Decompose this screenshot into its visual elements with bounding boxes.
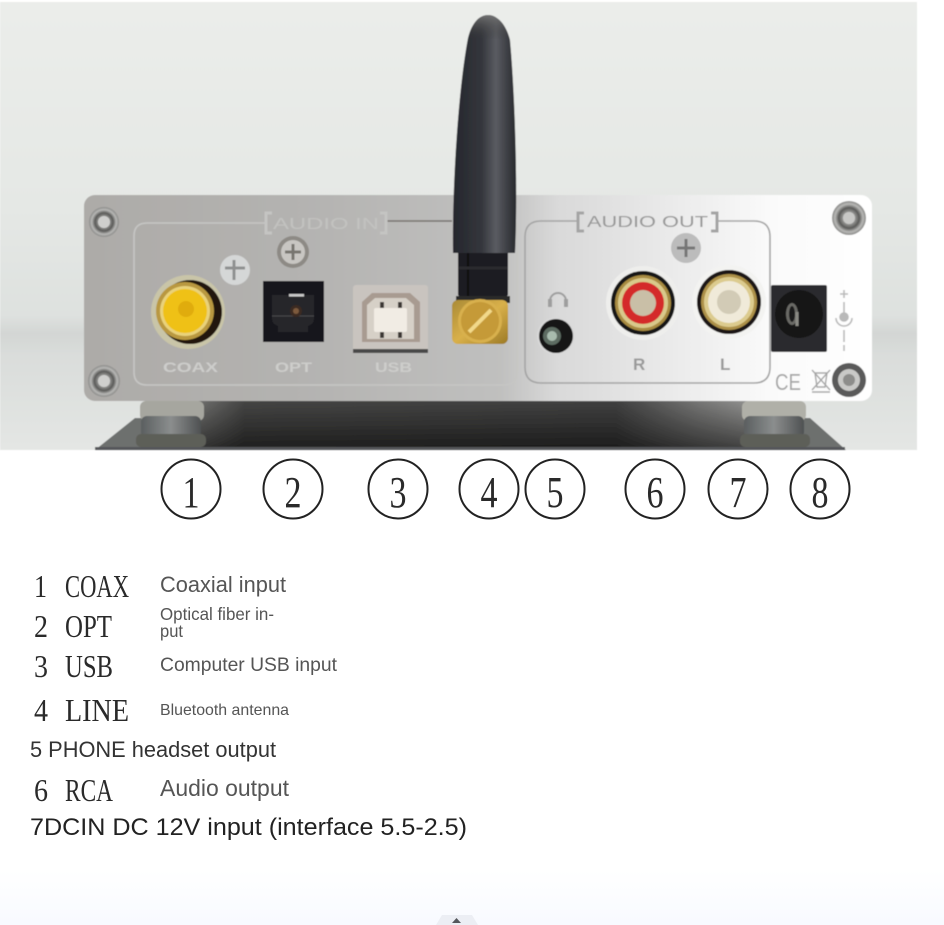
dc power jack (771, 285, 827, 352)
row 1 coax: COAX (65, 568, 129, 604)
row 6 rca: Audio output (160, 775, 290, 801)
callout 6 (626, 460, 684, 518)
rca port right (606, 266, 680, 340)
legend (30, 568, 467, 841)
right foot (740, 401, 810, 447)
callout 2 (264, 460, 322, 518)
audio in label: AUDIO IN (273, 216, 379, 233)
row 7 dc input: 7DCIN DC 12V input (interface 5.5-2.5) (30, 814, 467, 841)
rca label R: R (633, 355, 645, 374)
row 4 line: LINE (65, 692, 129, 728)
coax port (151, 275, 225, 349)
row 6 rca (34, 772, 290, 808)
coax label: COAX (163, 359, 219, 375)
corner screw top right (832, 201, 866, 235)
callout 4 (460, 460, 518, 518)
product photo (0, 2, 917, 450)
antenna (453, 15, 516, 303)
callout 3: 3 (390, 468, 406, 517)
row 4 line (34, 692, 289, 728)
scroll to top tab (436, 915, 478, 925)
row 6 rca: RCA (65, 772, 113, 808)
row 2 opt: OPT (65, 608, 112, 644)
row 1 coax: Coaxial input (160, 572, 286, 597)
usb label: USB (375, 359, 412, 375)
row 3 usb: USB (65, 648, 113, 684)
table under device (95, 418, 846, 450)
corner screw bottom left (88, 365, 120, 397)
page bottom tint (0, 870, 944, 925)
row 2 opt (34, 604, 274, 644)
row 4 line: 4 (34, 692, 48, 728)
row 2 opt: put (160, 621, 183, 641)
corner screw bottom right (832, 363, 866, 397)
row 1 coax (34, 568, 286, 604)
audio in frame (134, 213, 517, 385)
antenna gold connector (452, 299, 508, 344)
row 3 usb: Computer USB input (160, 655, 338, 676)
polarity symbol (836, 290, 852, 351)
row 1 coax: 1 (34, 568, 47, 604)
row 2 opt: 2 (34, 608, 48, 644)
opt label: OPT (275, 359, 313, 375)
left foot (136, 401, 206, 447)
row 3 usb (34, 648, 338, 684)
weee mark (812, 370, 830, 392)
row 6 rca: 6 (34, 772, 48, 808)
optical port (263, 281, 324, 342)
callout 1 (162, 460, 220, 518)
callout 7 (708, 460, 768, 518)
callout 8: 8 (812, 468, 828, 517)
audio out label: AUDIO OUT (587, 214, 708, 231)
callout 1: 1 (182, 468, 200, 517)
callout 2: 2 (284, 468, 302, 517)
callout 7: 7 (730, 468, 746, 517)
rca port left (692, 265, 766, 339)
usb port (353, 285, 428, 353)
row 2 opt: Optical fiber in- (160, 604, 274, 624)
callout 5: 5 (546, 468, 564, 517)
row 4 line: Bluetooth antenna (160, 702, 289, 719)
row 5 phone: 5 PHONE headset output (30, 737, 276, 762)
callout 8 (790, 460, 850, 518)
mounting screw above opt (277, 236, 309, 268)
shadow base between feet (95, 401, 845, 450)
number callouts (162, 460, 850, 518)
headphone icon (550, 293, 566, 307)
row 3 usb: 3 (34, 648, 48, 684)
rca label L: L (720, 355, 730, 374)
callout 4: 4 (480, 468, 498, 517)
silver rear panel (84, 15, 872, 401)
audio out frame (525, 213, 770, 383)
ce mark: CE (775, 369, 801, 395)
callout 5 (526, 460, 584, 518)
callout 6: 6 (646, 468, 664, 517)
mounting screw near coax (220, 255, 250, 285)
callout 3 (368, 460, 428, 518)
corner screw top left (89, 207, 119, 237)
headphone jack (537, 317, 575, 355)
mounting screw audio out (671, 233, 701, 263)
